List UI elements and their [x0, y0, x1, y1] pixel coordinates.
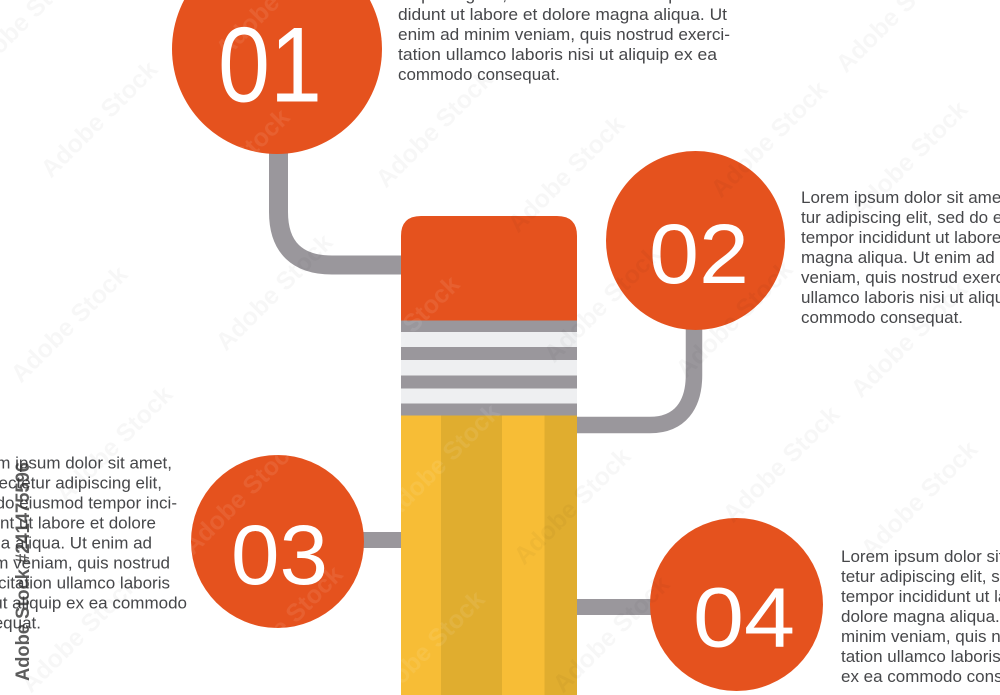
- pencil eraser: [401, 216, 577, 321]
- watermark: Adobe Stock pattern: Adobe Stock: [50, 380, 178, 508]
- text block: step 04: [841, 547, 1000, 686]
- watermark: Adobe Stock pattern: Adobe Stock: [855, 435, 983, 563]
- watermark: Adobe Stock pattern: Adobe Stock: [705, 75, 833, 203]
- text block: step 02: commodo consequat.: [801, 308, 963, 327]
- text block: step 01: [398, 0, 730, 84]
- watermark: Adobe Stock pattern: Adobe Stock: [502, 110, 630, 238]
- step 04 badge: 04: [693, 570, 795, 664]
- connector: step 04 to pencil: [576, 599, 654, 615]
- connector: step 03 to pencil: [360, 532, 402, 548]
- watermark: Adobe Stock pattern: Adobe Stock: [210, 228, 338, 356]
- watermark: Adobe Stock pattern: Adobe Stock: [377, 398, 505, 526]
- connector: step 01 to eraser: [278, 150, 402, 265]
- step 01 badge: [172, 0, 382, 154]
- watermark: Adobe Stock pattern: Adobe Stock: [15, 570, 143, 695]
- step 01 badge: 01: [218, 4, 322, 124]
- watermark: Adobe Stock pattern: Adobe Stock: [508, 442, 636, 570]
- pencil illustration: [401, 216, 577, 695]
- step 04 badge: [650, 518, 823, 691]
- watermark: vertical stock id: Adobe Stock #241475596: [13, 462, 34, 681]
- watermark: Adobe Stock pattern: Adobe Stock: [167, 103, 295, 231]
- watermark: Adobe Stock pattern: Adobe Stock: [220, 560, 348, 688]
- step 03 badge: [191, 455, 364, 628]
- pencil metal ferrule: [401, 320, 577, 416]
- step 02 badge: 02: [649, 207, 749, 301]
- text block: step 01: didunt ut labore et dolore magna aliqua. Ut: [398, 5, 727, 24]
- text block: step 03: [0, 454, 187, 632]
- pencil yellow body: [401, 416, 577, 695]
- watermark: Adobe Stock pattern: Adobe Stock: [370, 65, 498, 193]
- watermark: Adobe Stock pattern: Adobe Stock: [845, 95, 973, 223]
- step 02 badge: [606, 151, 785, 330]
- watermark: Adobe Stock pattern: Adobe Stock: [670, 255, 798, 383]
- step 03 badge: 03: [231, 508, 328, 602]
- text block: step 02: [801, 188, 1000, 327]
- watermark: Adobe Stock pattern: Adobe Stock: [35, 55, 163, 183]
- watermark: Adobe Stock pattern: Adobe Stock: [177, 432, 305, 560]
- watermark: Adobe Stock pattern: Adobe Stock: [845, 275, 973, 403]
- text block: step 01: commodo consequat.: [398, 65, 560, 84]
- watermark: Adobe Stock pattern: Adobe Stock: [547, 570, 675, 695]
- watermark: Adobe Stock pattern: Adobe Stock: [5, 260, 133, 388]
- text block: step 01: enim ad minim veniam, quis nostrud exerci-: [398, 25, 730, 44]
- connector: step 02 to ferrule: [577, 325, 694, 425]
- watermark: Adobe Stock pattern: Adobe Stock: [717, 400, 845, 528]
- watermark: Adobe Stock pattern: Adobe Stock: [538, 240, 666, 368]
- text block: step 01: tation ullamco laboris nisi ut aliquip ex ea: [398, 45, 718, 64]
- watermark: Adobe Stock pattern: Adobe Stock: [337, 270, 465, 398]
